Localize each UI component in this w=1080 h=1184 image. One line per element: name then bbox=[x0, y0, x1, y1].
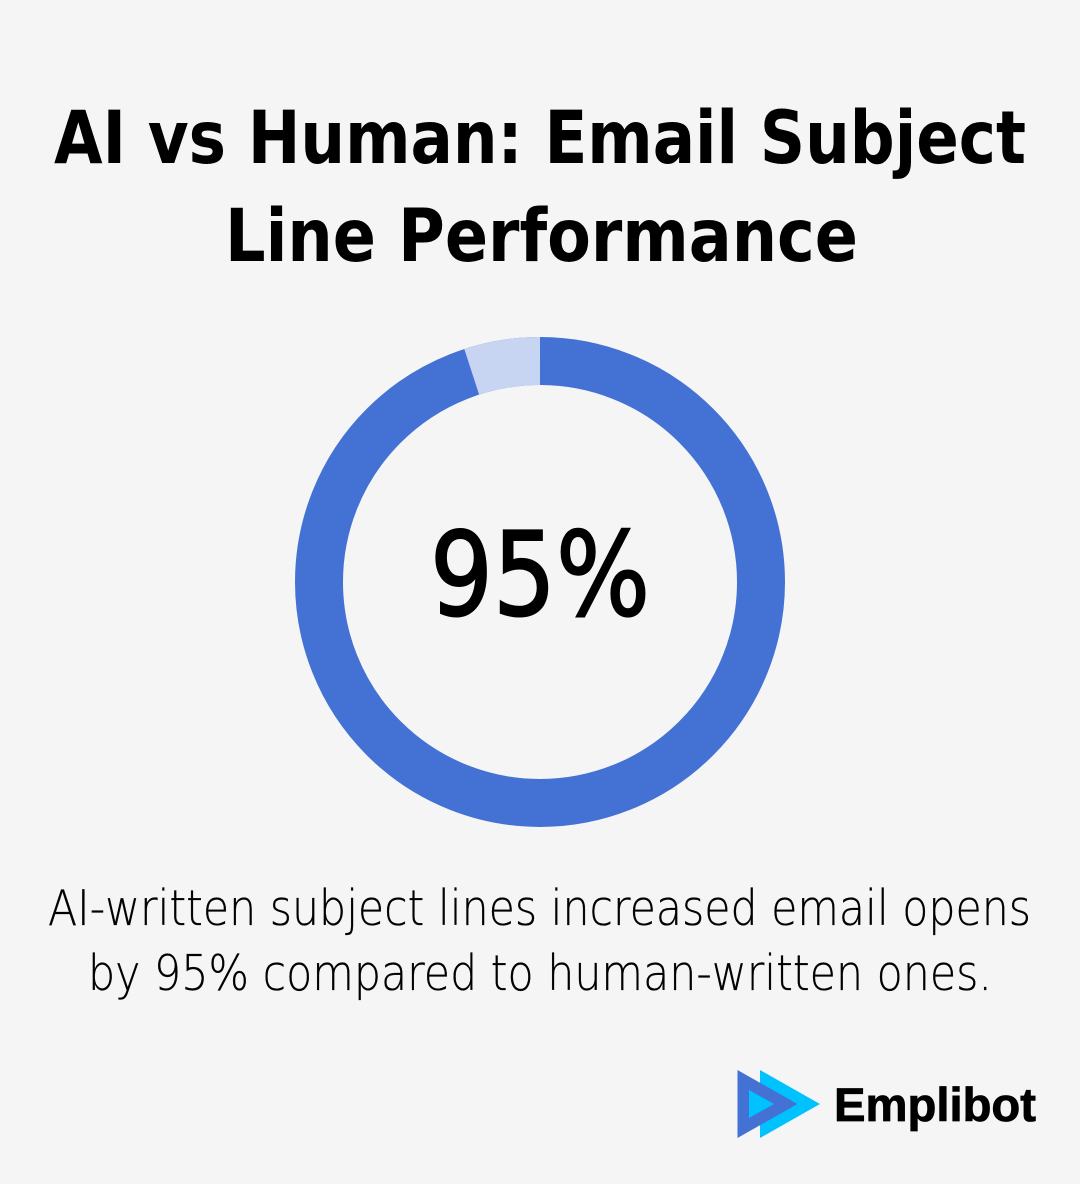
title: Line Performance bbox=[225, 194, 858, 279]
description text bbox=[48, 880, 1031, 1002]
title bbox=[54, 96, 1026, 279]
donut chart: 95% bbox=[319, 361, 761, 803]
donut value: 95% bbox=[430, 508, 650, 643]
logo wordmark: Emplibot bbox=[834, 1078, 1036, 1131]
icon: play triangles bbox=[738, 1070, 820, 1138]
logo: Emplibot bbox=[738, 1070, 1036, 1138]
